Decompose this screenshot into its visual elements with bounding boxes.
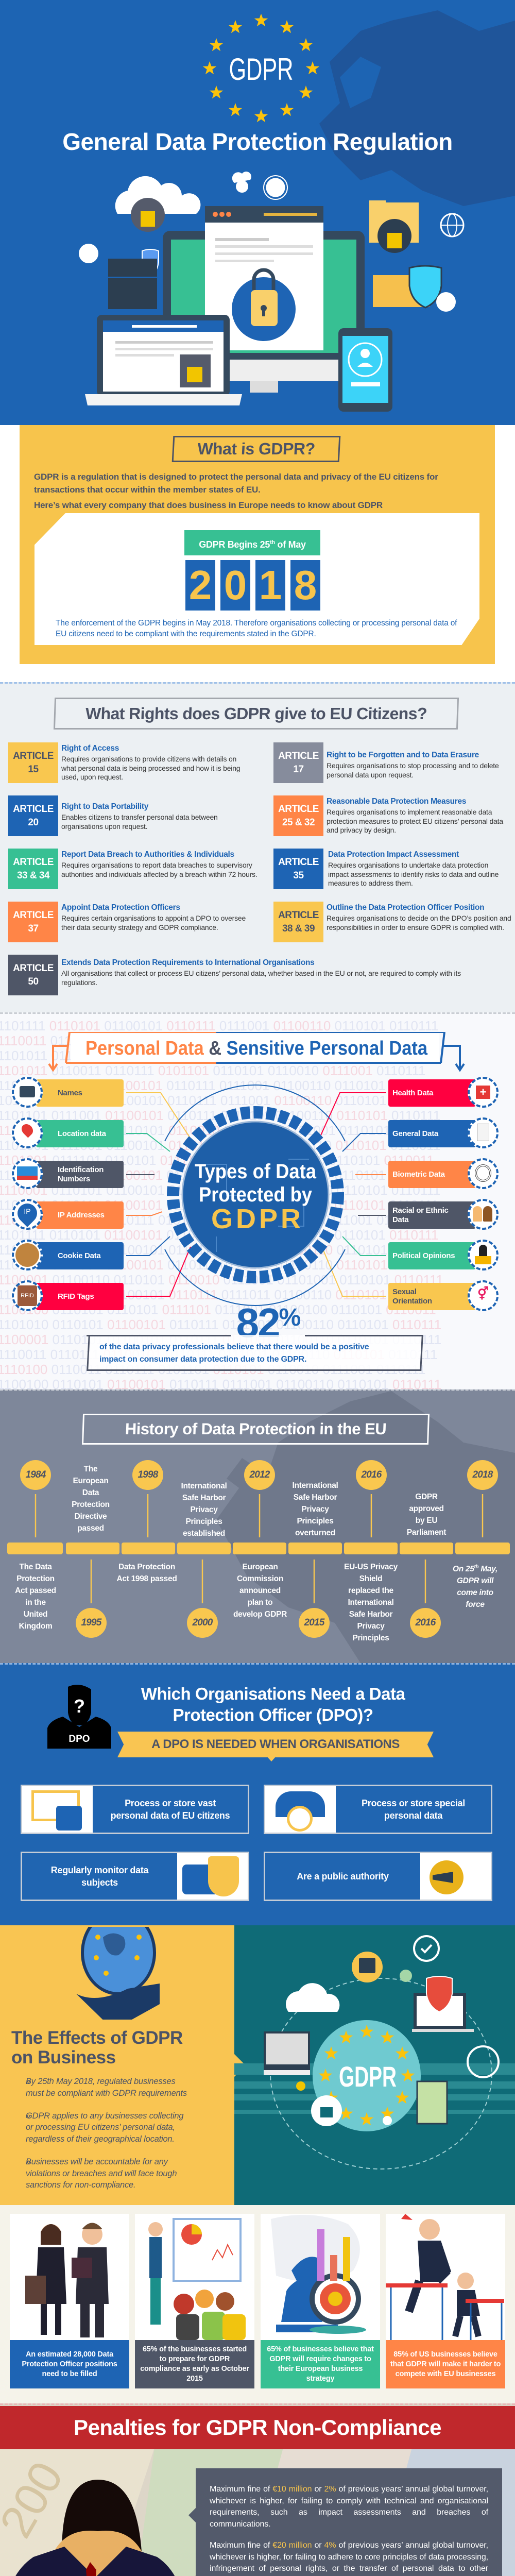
sexual orientation: Orientation (392, 1296, 432, 1306)
penalties title band: Penalties for GDPR Non-Compliance (74, 2415, 441, 2439)
year 2000: 2000 (192, 1617, 213, 1628)
map of europe (319, 10, 515, 206)
bullet list: » (26, 2111, 30, 2121)
illustration: worried businesswoman (15, 2480, 175, 2576)
section: penalties (0, 2403, 515, 2576)
event texts above: The (84, 1465, 97, 1473)
event bottom 3 (233, 1563, 287, 1619)
article 25 & 32: Requires organisations to implement reasonable data protection measures to protect EU citizens’ personal data and privacy by design. (327, 808, 503, 834)
event 3: Principles (297, 1517, 334, 1526)
heading: personal & sensitive data: Personal Data & Sensitive Personal Data (85, 1038, 428, 1059)
event bottom 5: force (466, 1600, 485, 1609)
section: personal data: 1101111 0110101 01100101 0110111 0111001 01100110 0110101 0110111 (0, 1018, 438, 1033)
stat: 82%: 82% (236, 1300, 299, 1346)
year 2018: 2018 (472, 1469, 493, 1480)
section: personal data: 1101001 0111001 01100101 0110111 0111011 01100110 0110101 0110011 (0, 1138, 440, 1153)
event texts above: Protection (72, 1500, 110, 1509)
section: personal data: 1100001 01100110 0110101 0110010 0111001 01101001 0110101 0110111 (0, 1272, 443, 1287)
article 37: 37 (28, 923, 39, 934)
event 2: Principles (185, 1517, 222, 1526)
flip-digit year 2018: 2 (189, 562, 212, 608)
event 3: International (292, 1481, 338, 1490)
section: personal data: 1101111 0110101 01100101 0110111 0111001 01100110 0110101 0110111 (0, 1227, 438, 1243)
event texts above: passed (77, 1524, 104, 1533)
article 33 & 34: ARTICLE (13, 857, 54, 868)
article 20: ARTICLE (13, 804, 54, 815)
section: business stats cards (0, 2205, 515, 2403)
heading: which organisations need a DPO: Which Organisations Need a Data (141, 1684, 405, 1703)
political opinions: Political Opinions (392, 1251, 455, 1260)
year 2016: 2016 (361, 1469, 382, 1480)
identification numbers: Identification (58, 1165, 104, 1174)
heading: personal & sensitive data (48, 1032, 465, 1072)
names: Names (58, 1088, 82, 1097)
event bottom 1: United (24, 1610, 47, 1619)
card: monitor data subjects: subjects (81, 1877, 118, 1888)
heading: What is GDPR? (172, 436, 340, 462)
card: 28,000 DPOs (10, 2214, 129, 2388)
event texts above: European (73, 1477, 109, 1485)
card: 65% prepared: 65% of the businesses started to prepare for GDPR compliance as early as October 2015 (140, 2345, 249, 2383)
section: personal data: 1101011 0110011 0110111 0101101 0110101 0110010 0111001 0110111 (0, 1063, 425, 1078)
card: vast personal data: personal data of EU citizens (111, 1810, 230, 1821)
bullet list: must be compliant with GDPR requirements (26, 2089, 187, 2098)
section: personal data: 1110011 0110111 01100101 0110111 0111001 01100110 0110101 0110111 (0, 1347, 438, 1362)
card: 65% strategy (261, 2214, 380, 2388)
year 1984 (20, 1460, 51, 1490)
icon: DPO silhouette (47, 1685, 111, 1749)
event bottom 3: Commission (237, 1574, 283, 1583)
enforcement text: The enforcement of the GDPR begins in May 2018. Therefore organisations collecting or processing personal data of EU citizens need to be compliant with the requirements stated in the GDPR. (56, 619, 457, 638)
event 3: Safe Harbor (294, 1493, 337, 1502)
article 17: Requires organisations to stop processing and to delete personal data upon request. (327, 761, 499, 779)
event texts above (72, 1465, 110, 1533)
event 2: established (183, 1529, 225, 1538)
section: rights (0, 682, 515, 1012)
article 20 (8, 795, 218, 836)
GDPR network illustration (234, 1935, 515, 2170)
year 2016b (410, 1608, 441, 1638)
general data: General Data (392, 1129, 438, 1138)
event 3 (292, 1481, 338, 1537)
racial or ethnic data: Racial or Ethnic (392, 1206, 449, 1215)
article 15: ARTICLE (13, 751, 54, 761)
year 1998: 1998 (138, 1469, 158, 1480)
card: special personal data: Process or store special (362, 1798, 465, 1808)
card: vast personal data (21, 1785, 249, 1834)
event texts above: Data (82, 1488, 99, 1497)
heading: effects: on Business (11, 2047, 116, 2067)
article 33 & 34: Report Data Breach to Authorities & Individuals (61, 850, 234, 859)
article 25 & 32: 25 & 32 (282, 817, 315, 828)
heading: history (82, 1414, 430, 1445)
central circle: types of data protected by GDPR (167, 1106, 344, 1283)
racial or ethnic data: Data (392, 1215, 408, 1224)
article 33 & 34: Requires organisations to report data breaches to supervisory authorities and individuals affected by a breach within 72 hours. (61, 861, 258, 878)
event bottom 4: International (348, 1598, 394, 1607)
political opinions (388, 1242, 476, 1269)
flip-digit year 2018: 8 (294, 562, 317, 608)
intro text (34, 472, 438, 510)
section: personal data: 1101011 0110111 01100101 0110111 0111001 01100110 0110101 0110111 (0, 1048, 438, 1063)
event 4: Parliament (407, 1528, 446, 1537)
event bottom 1: Act passed (15, 1586, 56, 1595)
article 35: Data Protection Impact Assessment (328, 850, 459, 859)
article 50: Extends Data Protection Requirements to International Organisations (61, 958, 314, 967)
article 37: Requires certain organisations to appoint a DPO to oversee their data security strategy and GDPR compliance. (61, 914, 246, 931)
timeline (7, 1460, 510, 1642)
event 3: Privacy (301, 1505, 329, 1514)
event bottom 3: European (242, 1563, 278, 1571)
heading: which organisations need a DPO: Protection Officer (DPO)? (173, 1705, 373, 1724)
bullet list: or processing EU citizens’ personal data, (26, 2123, 175, 2132)
bullet list: GDPR applies to any businesses collecting (26, 2111, 183, 2121)
GDPR network illustration: GDPR (339, 2060, 397, 2093)
event bottom 5: On 25th May, (453, 1564, 497, 1573)
article 35: Requires organisations to undertake data protection impact assessments to identify risks to data and outline measures to address them. (328, 861, 499, 887)
event bottom 5 (453, 1564, 497, 1609)
section: personal data: 1101111 0110101 01100101 0110111 0111001 01100110 0110101 0110111 (0, 1078, 438, 1093)
year 2016 (356, 1460, 387, 1490)
bullet list: sanctions for non-compliance. (26, 2180, 135, 2190)
icon: DPO silhouette: ? (74, 1696, 85, 1717)
article 50: All organisations that collect or process EU citizens’ personal data, whether based in the EU or not, are required to comply with its regulations. (61, 969, 461, 986)
card: 65% strategy: 65% of businesses believe that GDPR will require changes to their European business strategy (267, 2345, 374, 2383)
intro text: Here’s what every company that does business in Europe needs to know about GDPR (34, 500, 383, 510)
year 2015 (299, 1608, 330, 1638)
article 17: ARTICLE (278, 751, 319, 761)
event bottom 1: in the (25, 1598, 46, 1607)
event 4: by EU (416, 1516, 437, 1525)
event bottom 1: Kingdom (19, 1622, 53, 1631)
article 35 (273, 849, 499, 889)
section: personal data: 1100100 0110101 0110101 0111101 0111001 01100100 0110101 0110011 (0, 1302, 436, 1317)
health data: Health Data (392, 1088, 433, 1097)
general data (388, 1120, 476, 1147)
RFID tags: RFID Tags (58, 1292, 94, 1300)
event bottom 4: Privacy (357, 1622, 385, 1631)
logo: EU stars circle with GDPR (203, 14, 319, 123)
health data (388, 1079, 476, 1107)
article 15: 15 (28, 764, 39, 775)
heading: which organisations need a DPO (141, 1684, 406, 1724)
header section (0, 0, 515, 425)
year 2012: 2012 (249, 1469, 270, 1480)
article 35: 35 (293, 870, 304, 881)
event 4: GDPR (415, 1493, 438, 1501)
article 38 & 39 (273, 902, 511, 942)
timeline bar (7, 1494, 510, 1603)
heading: rights: What Rights does GDPR give to EU Citizens? (85, 704, 427, 723)
year 2015: 2015 (304, 1617, 324, 1628)
card: monitor data subjects: Regularly monitor data (51, 1865, 148, 1875)
hero illustration: devices with locks (79, 172, 465, 412)
event bottom 2: Act 1998 passed (116, 1574, 177, 1583)
left yellow panel (0, 1925, 234, 2205)
identification numbers: Numbers (58, 1175, 90, 1183)
RFID tags (36, 1283, 124, 1310)
sexual orientation: Sexual (392, 1287, 417, 1296)
identification numbers (36, 1161, 124, 1188)
year 1995 (76, 1608, 107, 1638)
card: public authority (264, 1852, 492, 1901)
article 20: Right to Data Portability (61, 802, 148, 811)
event bottom 5: GDPR will (457, 1577, 493, 1585)
section: personal data: 1110001 0110101 01100101 0110111 0111001 01100110 0110101 0110111 (0, 1182, 440, 1198)
fines text box (196, 2468, 502, 2576)
section: effects of GDPR (0, 1925, 515, 2205)
event bottom 1: The Data (19, 1563, 52, 1571)
event bottom 4: Shield (359, 1574, 382, 1583)
stat caption box: impact on consumer data protection due to the GDPR. (99, 1355, 306, 1364)
heading: What is GDPR?: What is GDPR? (197, 439, 316, 458)
article 37 (8, 902, 246, 942)
event bottom 2 (116, 1563, 177, 1583)
year 1984: 1984 (25, 1469, 46, 1480)
event bottom 4 (344, 1563, 398, 1642)
article 20: Enables citizens to transfer personal data between organisations upon request. (61, 813, 218, 831)
cookie data (36, 1242, 124, 1269)
event bottom 3: announced (239, 1586, 281, 1595)
event bottom 4: replaced the (348, 1586, 393, 1595)
left data types: RFID (21, 1293, 34, 1299)
event 2: Safe Harbor (182, 1494, 226, 1502)
location: Location data (58, 1129, 106, 1138)
article 37: Appoint Data Protection Officers (61, 903, 180, 912)
section: personal data: 1101111 0110101 01100101 0110111 0111001 01100110 0110101 0110111 (0, 1167, 438, 1183)
section: personal data: 1101011 0110011 0110111 0101101 0110101 0110010 0111001 0110111 (0, 1212, 425, 1228)
event texts above: Directive (75, 1512, 107, 1521)
section: personal data: 1101001 0111001 01100101 0110111 0111011 01100110 0110101 0110011 (0, 1287, 440, 1302)
map background (216, 1391, 515, 1663)
IP addresses: IP Addresses (58, 1211, 105, 1219)
event bottom 1 (15, 1563, 56, 1631)
article 35: ARTICLE (278, 857, 319, 868)
article 50: ARTICLE (13, 963, 54, 974)
year 2016b: 2016 (415, 1617, 436, 1628)
stat caption box: of the data privacy professionals believe that there would be a positive (99, 1343, 369, 1351)
section: history timeline (0, 1389, 515, 1663)
event bottom 4: EU-US Privacy (344, 1563, 398, 1571)
section: personal data: 1101010 0110101 01100101 0110111 0111001 01100110 0110101 0110111 (0, 1317, 441, 1332)
article 37: ARTICLE (13, 910, 54, 921)
event bottom 4: Principles (352, 1634, 389, 1642)
ribbon (117, 1732, 434, 1757)
article 25 & 32: ARTICLE (278, 804, 319, 815)
event 2: International (181, 1482, 227, 1490)
card: monitor data subjects (21, 1852, 249, 1901)
cookie data: Cookie Data (58, 1251, 100, 1260)
event 3: overturned (295, 1529, 335, 1537)
racial or ethnic data (388, 1201, 476, 1229)
section: DPO (0, 1663, 515, 1925)
bullet list: violations or breaches and will face tough (26, 2169, 177, 2178)
right data types (388, 1077, 499, 1311)
card: 85% US businesses (386, 2214, 505, 2388)
biometric data (388, 1161, 476, 1188)
event 4: approved (409, 1504, 444, 1513)
card: 85% US businesses: 85% of US businesses believe that GDPR will make it harder to compete with EU businesses (390, 2350, 501, 2378)
intro text: GDPR is a regulation that is designed to protect the personal data and privacy of the EU citizens for transactions that occur within the member states of EU. (34, 472, 438, 495)
heading: history: History of Data Protection in the EU (125, 1420, 387, 1438)
stat caption box (87, 1335, 423, 1371)
heading: rights (54, 698, 459, 730)
section: personal data: 1101101 0111001 01100101 0110111 0110101 01100110 0110101 0110111 (0, 1257, 440, 1273)
card: vast personal data: Process or store vast (125, 1798, 216, 1808)
section: personal data: 1110100 0110011 0110111 0101101 0110101 0110010 0111001 0110111 (0, 1362, 425, 1377)
bullet list (26, 2077, 187, 2190)
section: personal data: 1101101 0111001 01100101 0110111 0110101 01100110 0110101 0110111 (0, 1108, 440, 1123)
flip-digit year 2018: 1 (259, 562, 282, 608)
ribbon: A DPO IS NEEDED WHEN ORGANISATIONS (151, 1737, 400, 1751)
flip-digit year 2018 (185, 560, 320, 611)
card: public authority: Are a public authority (297, 1871, 389, 1882)
article 33 & 34 (8, 849, 258, 889)
left data types (12, 1077, 124, 1311)
event bottom 3: plan to (248, 1598, 272, 1607)
title: General Data Protection Regulation (62, 128, 453, 155)
event 2: Privacy (190, 1505, 218, 1514)
location (36, 1120, 124, 1147)
bullet list: » (26, 2077, 30, 2086)
connector lines (126, 1084, 386, 1306)
section: personal data: 1110011 0110101 01100101 0110111 0111001 01100110 0110101 0110111 (0, 1033, 439, 1048)
section: personal data: 1100001 01100110 0110101 0110010 0111001 01101001 0110101 0110111 (0, 1123, 443, 1138)
card: 28,000 DPOs: An estimated 28,000 Data Protection Officer positions need to be filled (22, 2350, 117, 2378)
event 2 (181, 1482, 227, 1538)
article 17: 17 (293, 764, 304, 775)
card: special personal data: personal data (384, 1810, 442, 1821)
article 38 & 39: Outline the Data Protection Officer Position (327, 903, 484, 912)
article 38 & 39: 38 & 39 (282, 923, 315, 934)
article 38 & 39: Requires organisations to decide on the DPO’s position and responsibilities in order to ensure GDPR is complied with. (327, 914, 511, 931)
event bottom 2: Data Protection (118, 1563, 175, 1571)
section: personal data (0, 1012, 515, 1389)
year 1998 (132, 1460, 163, 1490)
right data types: ⚥ (477, 1287, 489, 1301)
names (36, 1079, 124, 1107)
heading: effects: The Effects of GDPR (11, 2028, 183, 2048)
icon: globe in hand (76, 1927, 160, 2020)
event bottom 3: develop GDPR (233, 1610, 287, 1619)
right data types: + (480, 1086, 486, 1098)
event bottom 1: Protection (16, 1574, 55, 1583)
year 2000 (187, 1608, 218, 1638)
article 20: 20 (28, 817, 39, 828)
section: personal data: 1011011 0110011 01100101 0110111 0111001 01100110 0110101 0110111 (0, 1093, 439, 1108)
bullet list: Businesses will be accountable for any (26, 2157, 168, 2166)
pointer (234, 2054, 244, 2077)
penalties title band (0, 2406, 515, 2449)
icon: DPO silhouette: DPO (68, 1734, 90, 1744)
event bottom 4: Safe Harbor (349, 1610, 392, 1619)
banknote background (0, 2449, 515, 2576)
panel: what is GDPR (20, 425, 495, 664)
article 33 & 34: 33 & 34 (17, 870, 49, 881)
article 15: Right of Access (61, 744, 119, 753)
green label: GDPR Begins 25th of May (199, 539, 306, 550)
bullet list: regardless of their geographical location. (26, 2134, 175, 2143)
green label (184, 530, 320, 555)
biometric data: Biometric Data (392, 1170, 445, 1179)
central circle: types of data protected by GDPR: Types of Data (195, 1160, 317, 1183)
event bottom 5: come into (457, 1588, 493, 1597)
section: personal data: 1101001 0110011 01100101 0110111 0111001 01100110 0110101 0110111 (0, 1242, 440, 1258)
article 38 & 39: ARTICLE (278, 910, 319, 921)
article 15 (8, 742, 240, 783)
white card: GDPR begins 2018 (35, 513, 479, 645)
card: 65% prepared (135, 2214, 254, 2388)
left data types: IP (24, 1207, 31, 1215)
year 2012 (244, 1460, 275, 1490)
article 25 & 32 (273, 795, 504, 836)
year 2018 (467, 1460, 498, 1490)
article 15: Requires organisations to provide citizens with details on what personal data is being processed and how it is being used, upon request. (61, 755, 240, 781)
fine 1: Maximum fine of €10 million or 2% of previous years’ annual global turnover, whichever is higher, for failing to comply with technical and organisational requirements, such as impact assessments and breaches of communications. (210, 2485, 488, 2529)
IP addresses (36, 1201, 124, 1229)
year 1995: 1995 (81, 1617, 101, 1628)
event 4 (407, 1493, 446, 1537)
article 25 & 32: Reasonable Data Protection Measures (327, 797, 466, 806)
central circle: types of data protected by GDPR: Protected by (199, 1183, 313, 1206)
article 17: Right to be Forgotten and to Data Erasure (327, 751, 479, 759)
bullet list: » (26, 2157, 30, 2166)
section: personal data: 1101001 0111101 0110101 0111101 0111001 01100100 0110101 0110011 (0, 1153, 434, 1168)
section: personal data: 1100001 0110101 01100101 0110111 0111001 01100110 0110101 0110111 (0, 1332, 441, 1347)
section: personal data: 1101011 0110111 01100101 0110111 0111001 01100110 0110101 0110111 (0, 1197, 438, 1213)
card: special personal data (264, 1785, 492, 1834)
article 50: 50 (28, 976, 39, 987)
logo: EU stars circle with GDPR: GDPR (229, 52, 294, 87)
heading: effects (11, 2028, 183, 2067)
article 50 (8, 955, 461, 995)
flip-digit year 2018: 0 (224, 562, 247, 608)
central circle: types of data protected by GDPR: GDPR (211, 1204, 304, 1234)
article 17 (273, 742, 499, 783)
bullet list: By 25th May 2018, regulated businesses (26, 2077, 176, 2086)
sexual orientation (388, 1283, 476, 1310)
